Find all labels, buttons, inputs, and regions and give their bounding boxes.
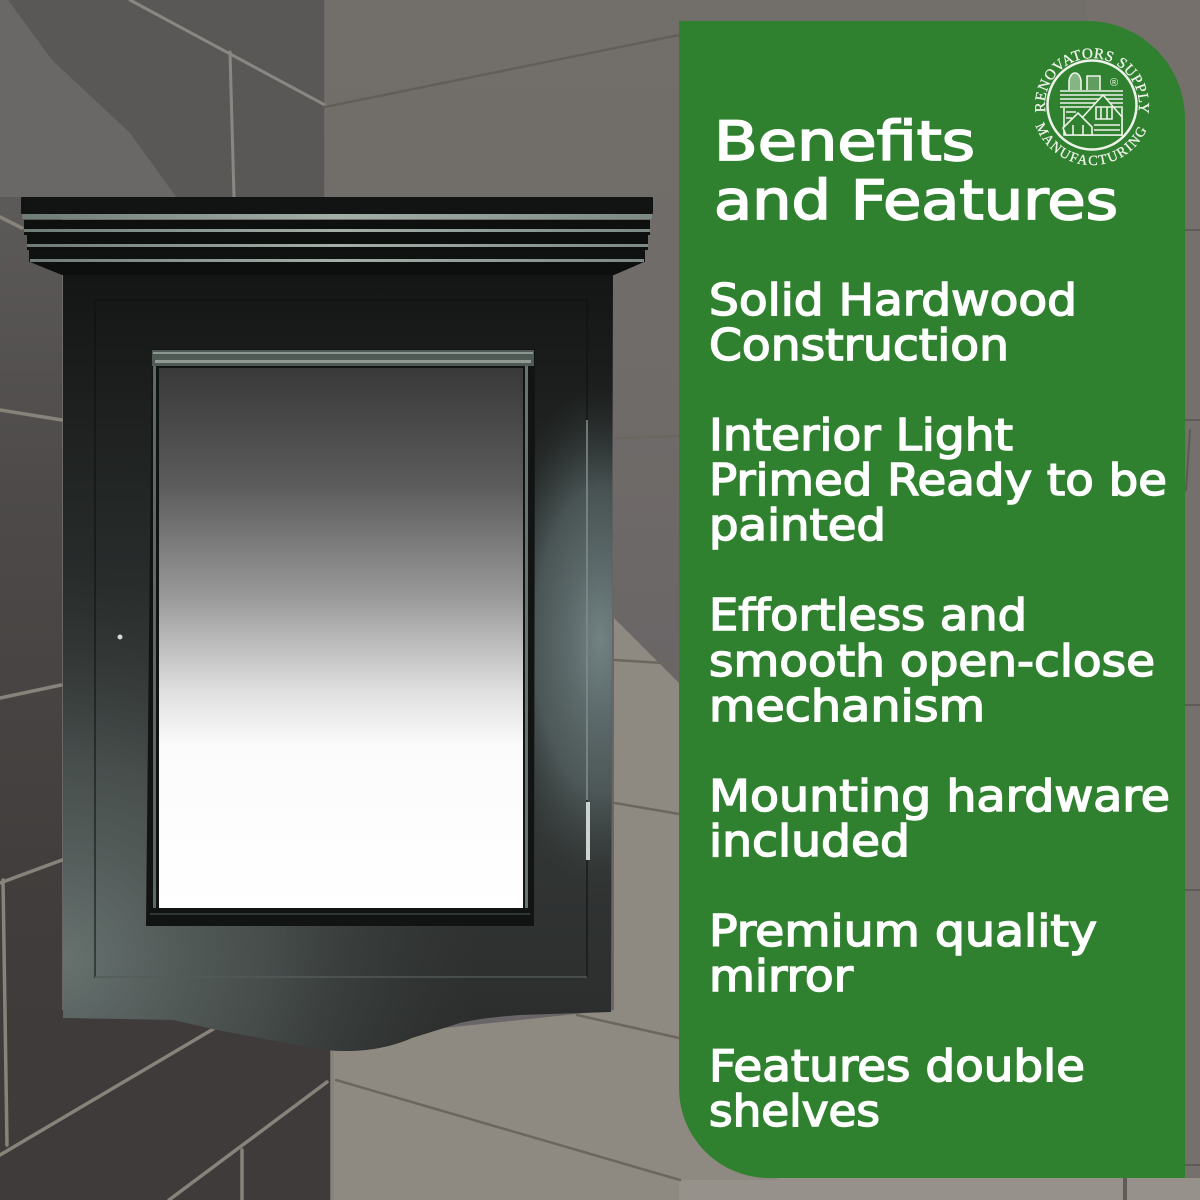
feature: interior light, primed: Primed Ready to be — [709, 455, 1167, 506]
panel: benefits and features — [679, 21, 1185, 1178]
mirror with moulded frame — [146, 349, 535, 926]
logo: Renovators Supply Manufacturing — [1035, 48, 1150, 166]
logo: Renovators Supply Manufacturing: MANUFACTURING — [1035, 122, 1146, 166]
heading — [714, 110, 1118, 232]
icon: house — [1060, 73, 1123, 135]
feature: solid hardwood construction — [709, 275, 1077, 371]
heading: Benefits — [714, 110, 975, 173]
feature: double shelves — [709, 1041, 1085, 1137]
feature: mounting hardware: included — [709, 816, 910, 867]
heading: and Features — [714, 169, 1118, 232]
recessed door panel outline — [95, 300, 587, 977]
feature: solid hardwood construction: Construction — [709, 320, 1009, 371]
feature: double shelves: Features double — [709, 1041, 1085, 1092]
cornice moulding — [21, 197, 653, 275]
feature: mounting hardware — [709, 771, 1170, 867]
feature: premium mirror: Premium quality — [709, 906, 1097, 957]
feature: open-close mechanism — [709, 590, 1155, 732]
registered mark: ® — [1110, 77, 1118, 89]
feature: interior light, primed — [709, 410, 1167, 551]
logo: Renovators Supply Manufacturing: RENOVATORS SUPPLY — [1035, 48, 1150, 114]
cabinet body — [62, 274, 614, 1064]
feature: premium mirror: mirror — [709, 951, 854, 1002]
feature: interior light, primed: Interior Light — [709, 410, 1013, 461]
feature: solid hardwood construction: Solid Hardwood — [709, 275, 1077, 326]
feature: double shelves: shelves — [709, 1086, 880, 1137]
feature: interior light, primed: painted — [709, 500, 886, 551]
feature: premium mirror — [709, 906, 1097, 1002]
hinge — [586, 802, 590, 860]
feature: open-close mechanism: Effortless and — [709, 590, 1027, 641]
feature: open-close mechanism: smooth open-close — [709, 636, 1155, 687]
feature: mounting hardware: Mounting hardware — [709, 771, 1170, 822]
feature: open-close mechanism: mechanism — [709, 681, 985, 732]
screw dot — [118, 634, 122, 640]
